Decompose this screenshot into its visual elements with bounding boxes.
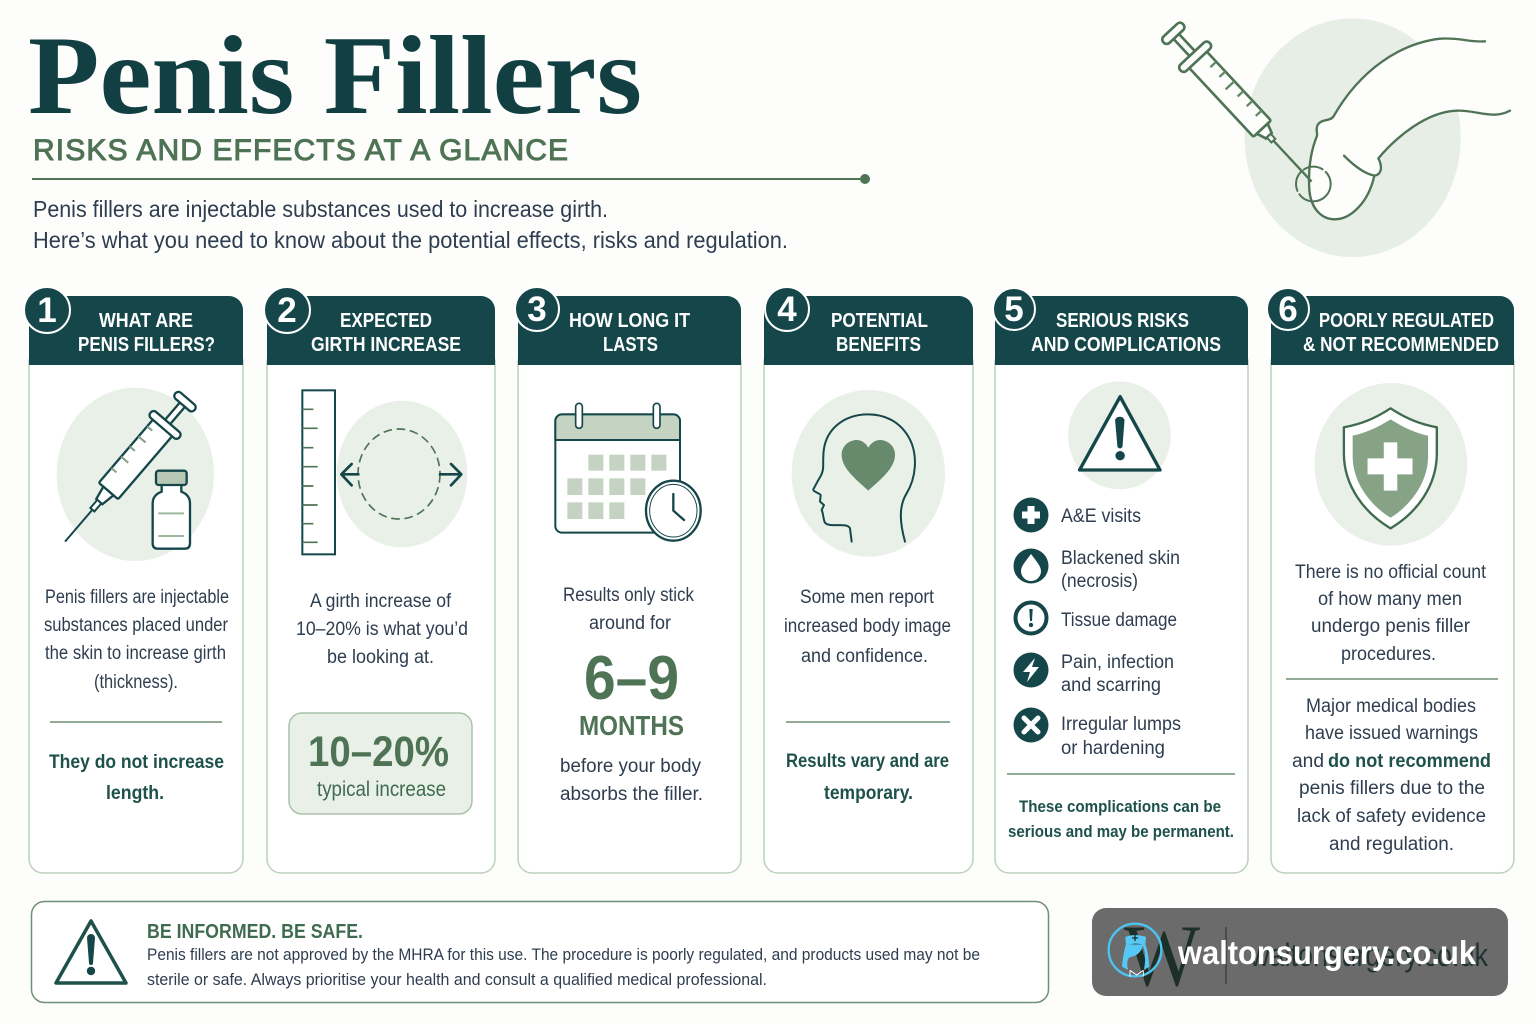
panel 4 text: Some men report xyxy=(800,587,935,608)
panel 3: how long it lasts xyxy=(515,287,741,873)
stat: 6-9 months: 6–9 xyxy=(584,644,679,713)
stat: 6-9 months: MONTHS xyxy=(579,710,684,741)
heading 1: PENIS FILLERS? xyxy=(78,334,215,356)
panel 2 text: be looking at. xyxy=(327,647,434,668)
badge 4: 4 xyxy=(777,290,797,329)
badge 3: 3 xyxy=(527,290,547,329)
panel 4 text: and confidence. xyxy=(801,646,928,667)
icon: syringe and vial xyxy=(51,386,214,561)
heading 1 xyxy=(78,310,215,356)
panel 4: potential benefits xyxy=(764,287,973,873)
risk: pain, infection and scarring: Pain, infection xyxy=(1061,652,1174,673)
heading 3: LASTS xyxy=(603,334,658,356)
stat box: 10-20% typical increase: typical increase xyxy=(317,778,446,801)
panel 6: poorly regulated and not recommended xyxy=(1267,288,1514,873)
panel 6 upper text: There is no official count xyxy=(1295,562,1487,583)
panel 1 text: substances placed under xyxy=(44,615,229,636)
panel 3 closing text: before your body xyxy=(560,756,701,777)
panel 6 lower text: and regulation. xyxy=(1329,834,1454,855)
badge 5 xyxy=(993,288,1035,330)
logo: walton surgery: waltonsurgery.co.uk xyxy=(1249,937,1489,973)
risk: A&E visits xyxy=(1014,498,1141,532)
callout text: Penis fillers are not approved by the MHRA for this use. The procedure is poorly regulated, and products used may not be xyxy=(147,945,980,964)
stat box: 10-20% typical increase: 10–20% xyxy=(308,728,449,776)
stat box: 10-20% typical increase xyxy=(289,713,472,814)
heading 1: WHAT ARE xyxy=(99,310,193,332)
icon: ruler and expanding circle xyxy=(302,390,467,554)
panel 1 text: the skin to increase girth xyxy=(45,643,226,664)
intro text xyxy=(33,196,788,253)
logo: walton surgery: waltonsurgery.co.uk xyxy=(1177,934,1477,971)
risk: blackened skin xyxy=(1014,548,1180,592)
panel 2 text: 10–20% is what you’d xyxy=(296,619,468,640)
heading 6 xyxy=(1303,310,1499,356)
title: Penis Fillers xyxy=(28,14,642,138)
panel 2 text: A girth increase of xyxy=(310,591,452,612)
icon: nurse xyxy=(1109,924,1161,977)
panel 1: what are penis fillers xyxy=(24,287,243,873)
badge 6: 6 xyxy=(1278,290,1298,329)
subtitle: RISKS AND EFFECTS AT A GLANCE xyxy=(33,134,568,167)
panel 2: expected girth increase xyxy=(264,287,495,873)
icon: head with heart xyxy=(792,390,945,557)
heading 5: SERIOUS RISKS xyxy=(1056,310,1189,332)
heading 3: HOW LONG IT xyxy=(569,310,690,332)
panel 6 lower text: lack of safety evidence xyxy=(1297,806,1486,827)
intro text: Penis fillers are injectable substances used to increase girth. xyxy=(33,196,608,222)
panel 6 upper text xyxy=(1295,562,1487,665)
heading 5 xyxy=(1031,310,1221,356)
panel 6 lower text: have issued warnings xyxy=(1305,723,1478,744)
risk: blackened skin: Blackened skin xyxy=(1061,548,1180,569)
risk: blackened skin: (necrosis) xyxy=(1061,571,1138,592)
panel 1 text xyxy=(44,587,229,693)
logo: walton surgery: W xyxy=(1124,908,1200,1005)
heading 6: & NOT RECOMMENDED xyxy=(1303,334,1499,356)
callout text: BE INFORMED. BE SAFE. xyxy=(147,921,363,943)
hero illustration: syringe and injection site xyxy=(1156,17,1510,257)
panel 6 lower text: penis fillers due to the xyxy=(1299,778,1485,799)
intro text: Here’s what you need to know about the potential effects, risks and regulation. xyxy=(33,227,788,253)
heading 3 xyxy=(569,310,690,356)
stat: 6-9 months xyxy=(579,644,684,741)
badge 1: 1 xyxy=(37,291,57,330)
callout text xyxy=(147,921,980,989)
panel 3 closing text xyxy=(560,756,703,805)
risk: irregular lumps or hardening: Irregular lumps xyxy=(1061,714,1181,735)
risk: tissue damage: Tissue damage xyxy=(1061,610,1177,631)
panel 5 key point: These complications can be xyxy=(1019,797,1221,816)
panel 1 key point xyxy=(49,752,224,804)
panel 4 text xyxy=(784,587,951,667)
panel 4 key point: Results vary and are xyxy=(786,751,949,772)
panel 4 text: increased body image xyxy=(784,616,951,637)
risk: irregular lumps or hardening: or hardening xyxy=(1061,738,1165,759)
heading 4: BENEFITS xyxy=(836,334,921,356)
heading 2: EXPECTED xyxy=(340,310,432,332)
panel 6 upper text: procedures. xyxy=(1341,644,1436,665)
panel 1 key point: They do not increase xyxy=(49,752,224,773)
badge 3 xyxy=(515,287,559,331)
panel 3 lead text: around for xyxy=(589,613,672,634)
badge 5: 5 xyxy=(1004,290,1024,329)
risk: pain, infection and scarring xyxy=(1014,652,1174,696)
icon: shield with cross xyxy=(1314,383,1467,546)
panel 6 lower text xyxy=(1292,696,1491,855)
icon: warning triangle xyxy=(1068,381,1171,489)
panel 5: serious risks and complications xyxy=(993,288,1248,873)
risk: pain, infection and scarring: and scarring xyxy=(1061,675,1161,696)
panel 4 key point: temporary. xyxy=(824,783,913,804)
icon: footer warning triangle xyxy=(56,921,126,983)
badge 1 xyxy=(24,287,70,333)
panel 6 lower text: do not recommend xyxy=(1328,751,1491,772)
callout text: sterile or safe. Always prioritise your health and consult a qualified medical professional. xyxy=(147,970,767,989)
panel 1 text: Penis fillers are injectable xyxy=(45,587,229,608)
panel 1 text: (thickness). xyxy=(94,672,178,693)
panel 3 closing text: absorbs the filler. xyxy=(560,784,703,805)
heading 6: POORLY REGULATED xyxy=(1319,310,1494,332)
icon: calendar and clock xyxy=(555,403,701,541)
callout: be informed, be safe xyxy=(32,902,1048,1002)
panel 5 key point: serious and may be permanent. xyxy=(1008,822,1234,841)
risk: A&E visits: A&E visits xyxy=(1061,506,1141,527)
heading 2: GIRTH INCREASE xyxy=(311,334,461,356)
risk: irregular lumps or hardening xyxy=(1014,708,1181,759)
risk: tissue damage xyxy=(1016,602,1177,634)
panel 6 lower text: Major medical bodies xyxy=(1306,696,1476,717)
panel 3 lead text: Results only stick xyxy=(563,585,694,606)
badge 6 xyxy=(1267,288,1309,330)
panel 4 key point xyxy=(786,751,949,804)
heading 2 xyxy=(311,310,461,356)
panel 6 lower text: and xyxy=(1292,751,1324,772)
panel 2 text xyxy=(296,591,468,668)
panel 1 key point: length. xyxy=(106,783,164,804)
panel 5 key point xyxy=(1008,797,1234,841)
panel 6 upper text: of how many men xyxy=(1318,589,1462,610)
panel 3 lead text xyxy=(563,585,694,634)
badge 4 xyxy=(765,287,809,331)
heading 4: POTENTIAL xyxy=(831,310,928,332)
heading 5: AND COMPLICATIONS xyxy=(1031,334,1221,356)
badge 2 xyxy=(264,287,310,333)
title rule with dot xyxy=(32,174,870,184)
heading 4 xyxy=(831,310,928,356)
logo: walton surgery xyxy=(1092,908,1508,1005)
panel 6 upper text: undergo penis filler xyxy=(1311,616,1471,637)
badge 2: 2 xyxy=(277,291,297,330)
